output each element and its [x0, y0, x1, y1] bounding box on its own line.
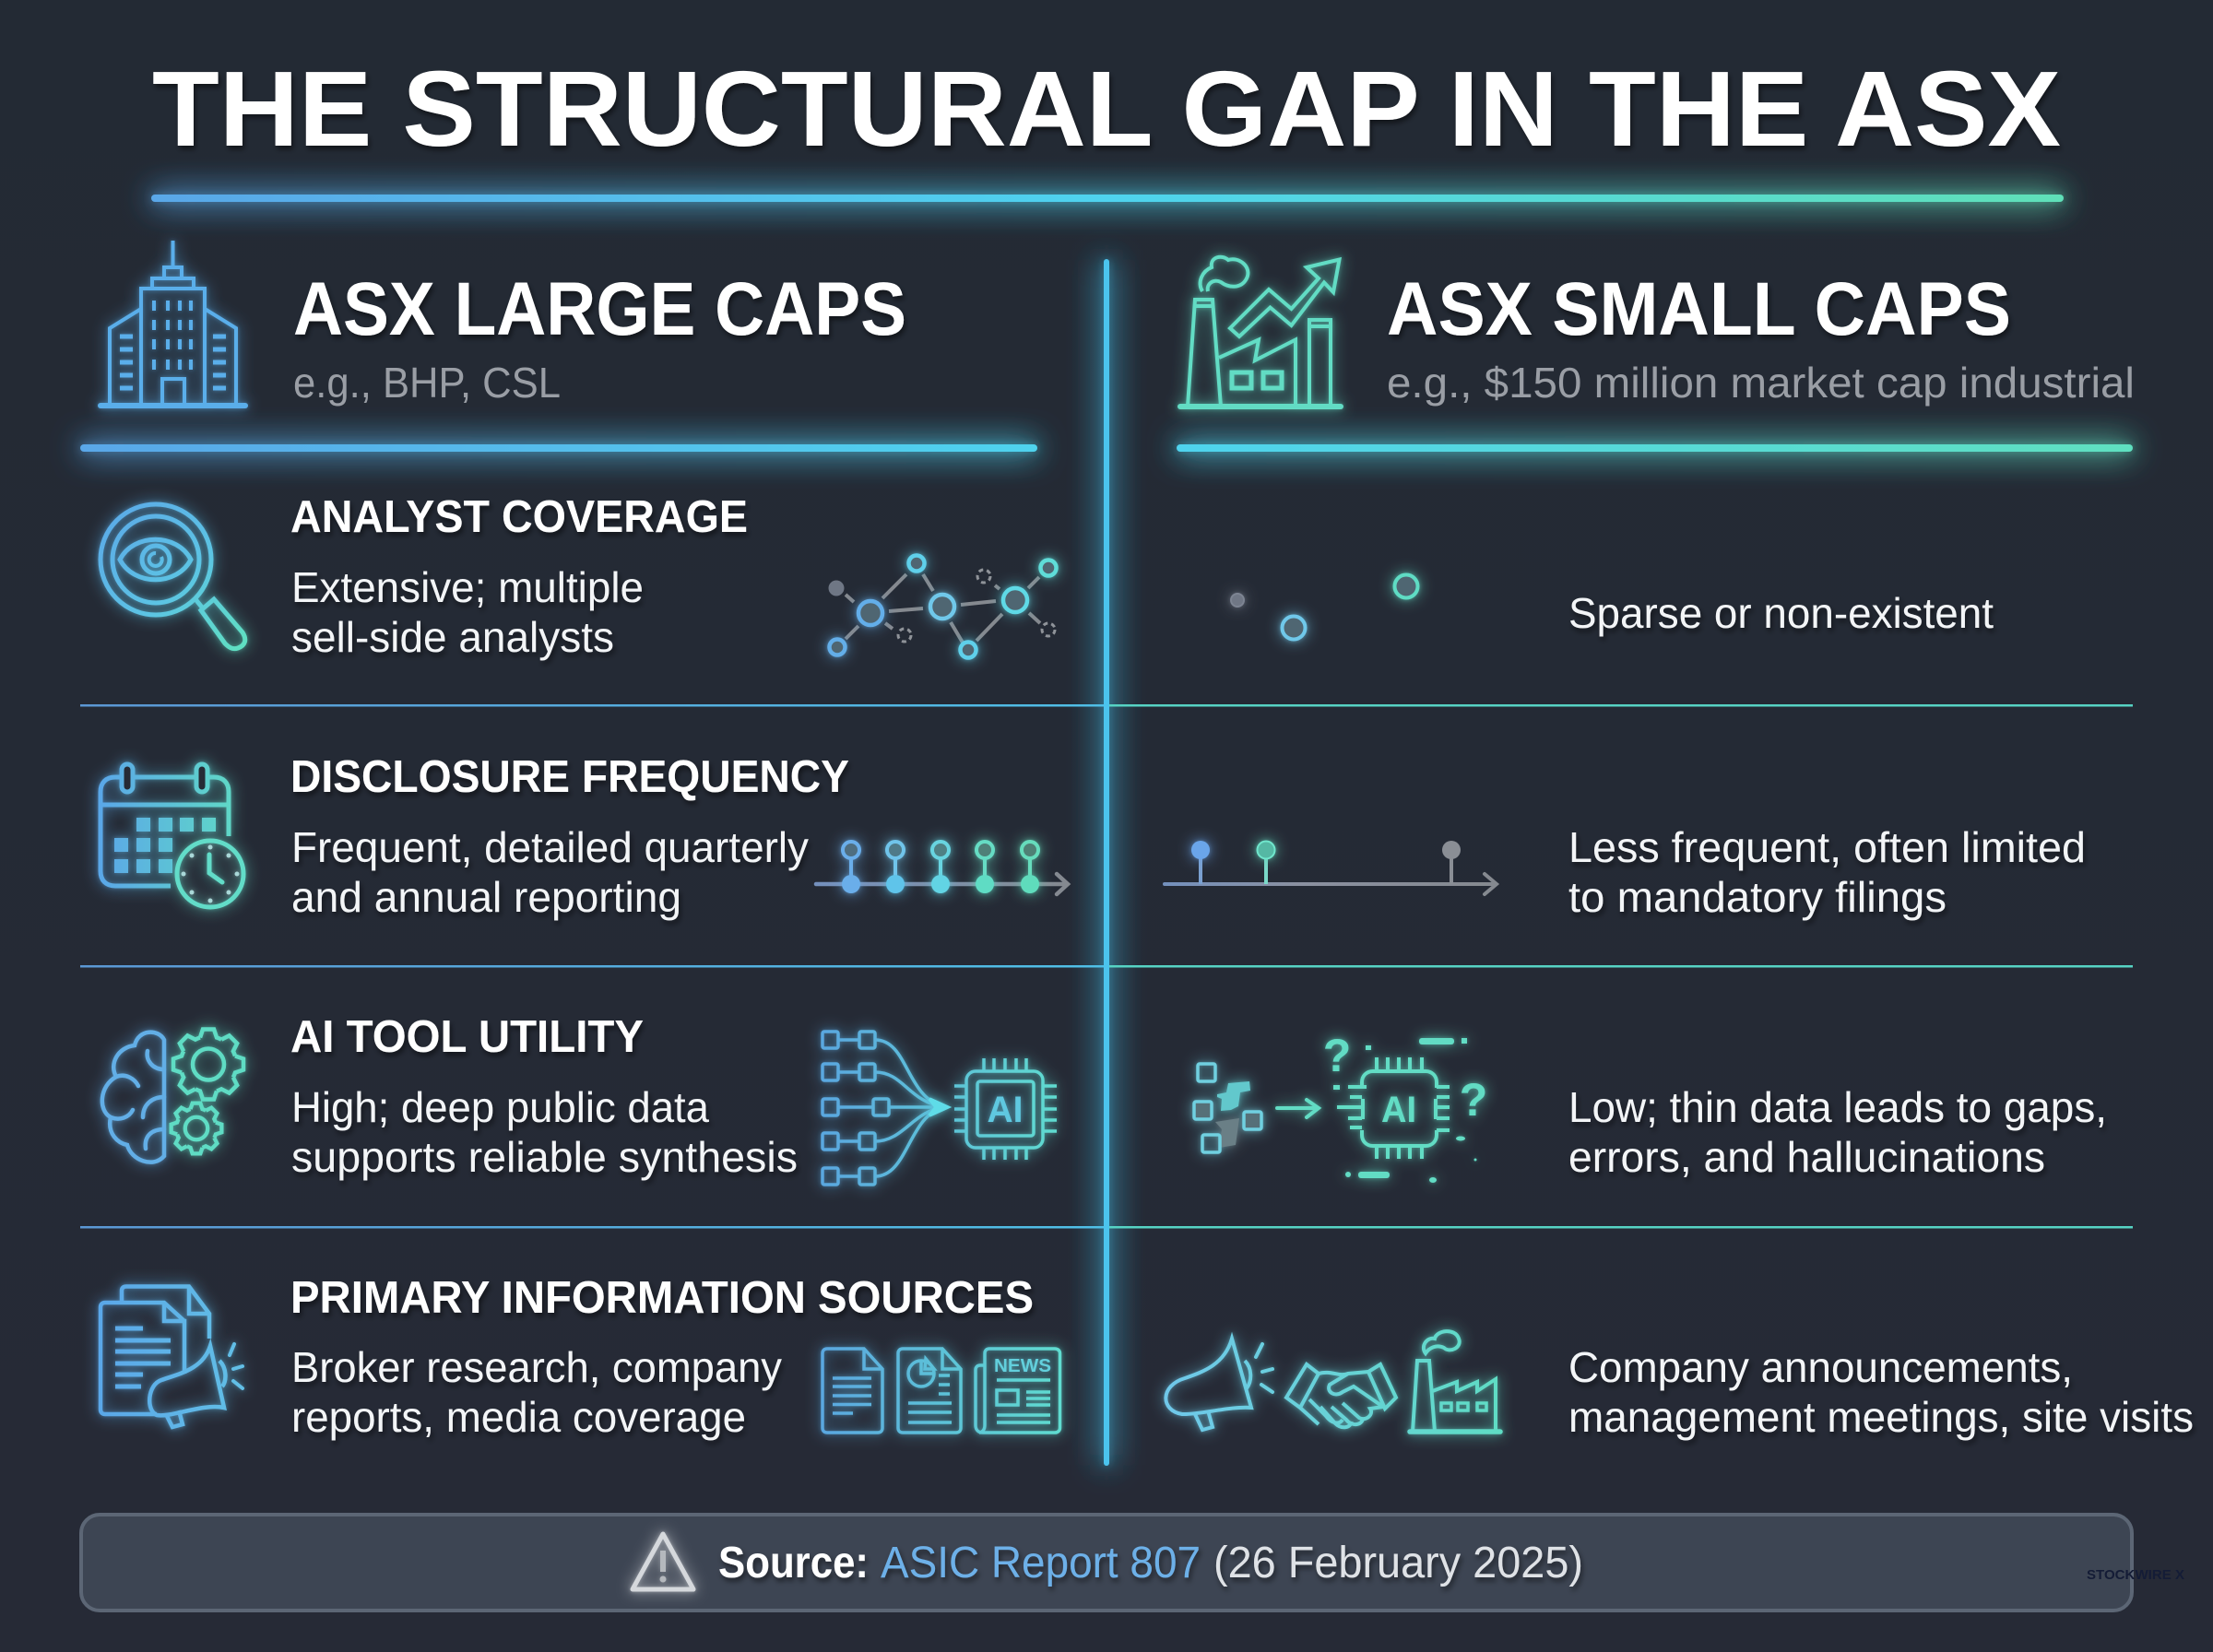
large caps rule	[80, 444, 1037, 452]
row: disclosure frequency, small caps	[1165, 823, 2086, 921]
text: small cap disclosure: Less frequent, often limited	[1568, 823, 2086, 871]
icon: thin data leading to uncertain AI chip	[1194, 1030, 1487, 1183]
text: large cap AI utility	[291, 1083, 798, 1181]
row: primary information sources, large caps	[101, 1273, 1060, 1441]
text: large cap analyst coverage: Extensive; multiple	[291, 563, 644, 611]
centre vertical divider	[1104, 259, 1109, 1466]
icon: reports and newspaper	[822, 1349, 1060, 1433]
row: disclosure frequency, large caps	[101, 752, 1068, 921]
icon: structured data feeding AI chip	[822, 1032, 1057, 1185]
icon: warning triangle	[633, 1534, 693, 1589]
source citation: Source:	[718, 1539, 869, 1587]
text: large cap sources: reports, media coverage	[291, 1393, 746, 1441]
row: primary information sources, small caps	[1166, 1331, 2194, 1441]
heading: AI tool utility: AI TOOL UTILITY	[290, 1012, 644, 1062]
text: small cap disclosure: to mandatory filings	[1568, 873, 1947, 921]
icon: thin data leading to uncertain AI chip: ?	[1460, 1074, 1487, 1126]
heading: primary information sources: PRIMARY INFORMATION SOURCES	[290, 1273, 1034, 1323]
icon: brain and gears	[102, 1029, 243, 1162]
source panel	[81, 1515, 2132, 1611]
icon: office building	[101, 241, 245, 406]
icon: thin data leading to uncertain AI chip: ?	[1323, 1030, 1351, 1081]
text: large cap analyst coverage	[291, 563, 644, 661]
heading: analyst coverage: ANALYST COVERAGE	[290, 492, 748, 542]
icon: documents and megaphone	[101, 1287, 243, 1427]
icon: megaphone, handshake and factory	[1166, 1331, 1500, 1432]
icon: dense analyst network	[828, 555, 1057, 658]
title rule	[151, 195, 2064, 202]
watermark: Stockwire X: STOCKWIRE X	[2087, 1567, 2184, 1583]
heading: disclosure frequency: DISCLOSURE FREQUENCY	[290, 752, 849, 802]
text: large cap AI utility: supports reliable synthesis	[291, 1133, 798, 1181]
text: small cap sources: Company announcements,	[1568, 1343, 2073, 1391]
text: large cap analyst coverage: sell-side analysts	[291, 613, 614, 661]
heading: ASX small caps: ASX SMALL CAPS	[1387, 267, 2011, 351]
small caps rule	[1177, 444, 2133, 452]
icon: factory with rising arrow	[1180, 257, 1341, 407]
text: small cap sources: management meetings, site visits	[1568, 1393, 2194, 1441]
icon: thin data leading to uncertain AI chip: AI	[1381, 1090, 1416, 1130]
row: analyst coverage, small caps	[1231, 575, 1994, 640]
row: AI tool utility, large caps	[102, 1012, 1057, 1185]
icon: calendar with clock	[101, 764, 243, 907]
text: large cap disclosure: and annual reporting	[291, 873, 681, 921]
icon: sparse data points	[1231, 575, 1418, 640]
subheading: small cap example: e.g., $150 million market cap industrial	[1387, 359, 2135, 407]
icon: reports and newspaper: NEWS	[994, 1356, 1051, 1376]
icon: magnifier with eye	[101, 504, 245, 649]
text: small cap sources	[1568, 1343, 2194, 1441]
subheading: large cap examples: e.g., BHP, CSL	[293, 359, 561, 407]
source citation: (26 February 2025)	[1213, 1539, 1583, 1587]
text: small cap AI utility: Low; thin data leads to gaps,	[1568, 1083, 2107, 1131]
panel: small caps header	[1177, 257, 2135, 452]
title: THE STRUCTURAL GAP IN THE ASX	[152, 49, 2061, 169]
source citation	[718, 1539, 1583, 1587]
panel: large caps header	[80, 241, 1037, 452]
icon: structured data feeding AI chip: AI	[987, 1090, 1024, 1130]
text: large cap disclosure	[291, 823, 809, 921]
source citation: ASIC Report 807	[881, 1539, 1201, 1587]
text: small cap AI utility: errors, and hallucinations	[1568, 1133, 2045, 1181]
row: analyst coverage, large caps	[101, 492, 1057, 661]
icon: frequent reporting timeline	[816, 842, 1068, 894]
row: AI tool utility, small caps	[1194, 1030, 2107, 1183]
text: large cap sources: Broker research, company	[291, 1343, 782, 1391]
icon: sparse reporting timeline	[1165, 841, 1497, 894]
heading: ASX large caps: ASX LARGE CAPS	[293, 267, 906, 351]
text: small cap AI utility	[1568, 1083, 2107, 1181]
text: large cap disclosure: Frequent, detailed quarterly	[291, 823, 809, 871]
text: large cap sources	[291, 1343, 782, 1441]
text: small cap disclosure	[1568, 823, 2086, 921]
text: large cap AI utility: High; deep public data	[291, 1083, 709, 1131]
text: small cap analyst coverage: Sparse or non-existent	[1568, 589, 1994, 637]
